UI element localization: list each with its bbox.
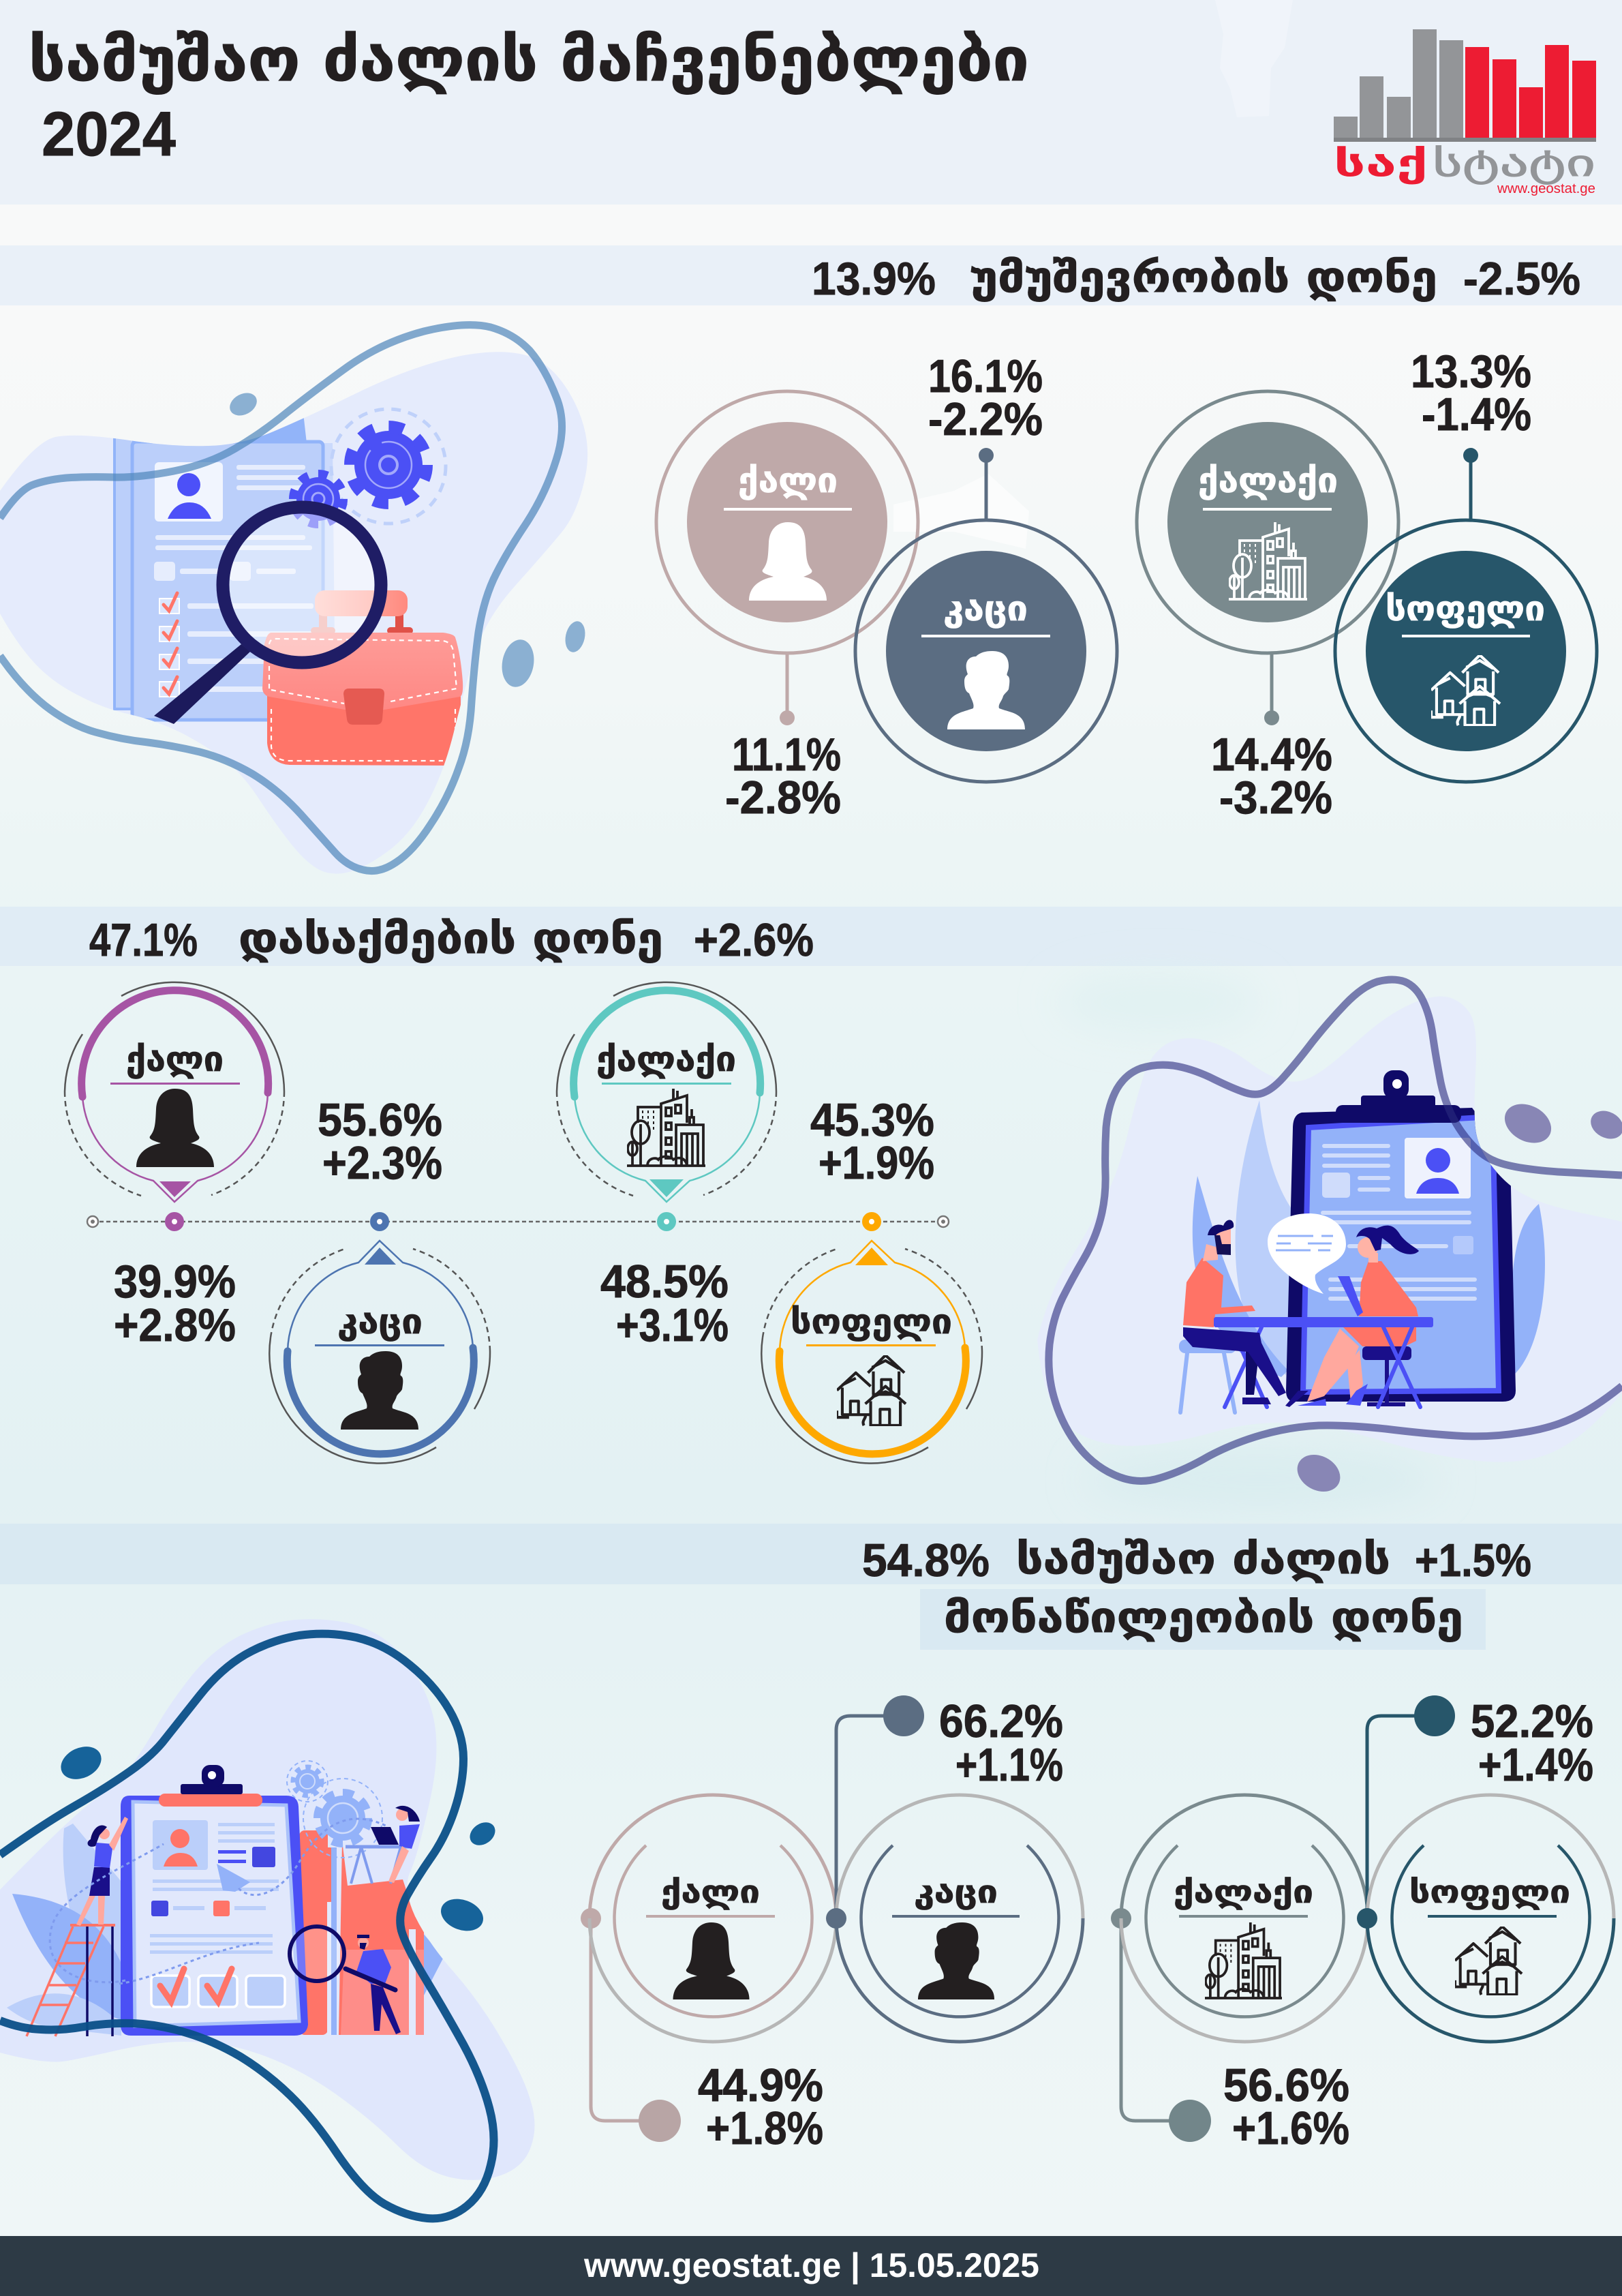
title: 2024: [42, 100, 176, 169]
stat: rural employment: +1.9%: [818, 1137, 934, 1189]
stat: rural unemployment: 13.3%: [1411, 346, 1531, 397]
stat: urban employment: +3.1%: [616, 1299, 729, 1351]
stat: rural unemployment: -1.4%: [1422, 389, 1531, 440]
section 2: employment: [0, 907, 1622, 1510]
heading band: unemployment rate: 13.9%: [812, 253, 936, 305]
heading band: unemployment rate: [0, 245, 1622, 305]
timeline: [87, 1215, 949, 1228]
stat: woman employment: [65, 982, 284, 1351]
stat: rural employment: [761, 1094, 982, 1463]
section 1: unemployment: [0, 245, 1622, 874]
logo bar chart: [1334, 29, 1596, 142]
stat: woman participation: +1.8%: [706, 2102, 823, 2154]
logo url: www.geostat.ge: [1497, 181, 1595, 196]
heading band: employment rate: დასაქმების დონე: [239, 913, 663, 963]
stat: woman employment: +2.8%: [114, 1299, 236, 1351]
stat: rural employment: სოფელი: [791, 1302, 952, 1342]
stat: man unemployment: კაცი: [943, 589, 1028, 629]
stat: man unemployment: 16.1%: [928, 350, 1043, 402]
stat: man employment: [269, 1094, 490, 1463]
stat: rural participation: +1.4%: [1478, 1739, 1593, 1791]
stat: woman unemployment: [656, 391, 918, 824]
illustration: clipboard with people: [0, 1619, 534, 2218]
stat: rural unemployment: სოფელი: [1386, 589, 1545, 629]
stat: man employment: +2.3%: [322, 1137, 442, 1189]
stat: man employment: 55.6%: [318, 1094, 442, 1146]
stat: rural unemployment: [1335, 346, 1597, 782]
logo wordmark: საქ: [1334, 142, 1428, 185]
header band: [0, 0, 1622, 205]
stat: man unemployment: [855, 350, 1117, 782]
heading band: participation rate: +1.5%: [1415, 1535, 1531, 1586]
stat: urban participation: 56.6%: [1223, 2059, 1349, 2111]
stat: man employment: კაცი: [337, 1302, 423, 1342]
heading band: employment rate: +2.6%: [694, 914, 814, 966]
stat: man unemployment: -2.2%: [928, 393, 1043, 445]
watercolour wash behind illustration: [1056, 971, 1438, 1510]
stat: man participation: [826, 1695, 1083, 2042]
stat: urban employment: ქალაქი: [596, 1040, 736, 1079]
heading band: unemployment rate: -2.5%: [1463, 253, 1580, 305]
title: სამუშაო ძალის მაჩვენებლები: [29, 25, 1029, 95]
stat: woman participation: [581, 1795, 836, 2154]
logo wordmark: [1334, 142, 1595, 185]
stat: woman unemployment: 11.1%: [732, 729, 841, 781]
illustration: interview at table: [1037, 980, 1622, 1499]
illustration: job search with briefcase: [0, 325, 587, 874]
stat: man participation: 66.2%: [939, 1695, 1063, 1747]
stat: urban unemployment: -3.2%: [1219, 772, 1332, 824]
stat: woman unemployment: -2.8%: [725, 772, 841, 824]
heading band: participation rate: მონაწილეობის დონე: [944, 1592, 1463, 1642]
stat: woman participation: ქალი: [661, 1873, 760, 1910]
stat: urban participation: [1111, 1795, 1368, 2154]
title: [29, 25, 1029, 169]
stat: man participation: კაცი: [914, 1873, 998, 1910]
stat: urban unemployment: 14.4%: [1211, 729, 1332, 781]
heading band: participation rate: [0, 1524, 1622, 1650]
stat: urban participation: ქალაქი: [1174, 1873, 1313, 1910]
stat: man participation: +1.1%: [955, 1739, 1063, 1791]
stat: rural employment: 45.3%: [810, 1094, 934, 1146]
stat: rural participation: სოფელი: [1409, 1873, 1570, 1910]
heading band: employment rate: 47.1%: [89, 914, 198, 966]
logo: geostat: [1334, 29, 1596, 196]
stat: urban unemployment: ქალაქი: [1198, 461, 1338, 500]
stat: woman employment: ქალი: [126, 1040, 224, 1079]
logo wordmark: სტატი: [1433, 142, 1595, 185]
heading band: participation rate: სამუშაო ძალის: [1016, 1534, 1390, 1584]
stat: urban employment: [557, 982, 776, 1351]
stat: woman employment: 39.9%: [114, 1256, 236, 1308]
stat: rural participation: [1357, 1695, 1614, 2042]
heading band: employment rate: [0, 907, 1622, 966]
heading band: unemployment rate: უმუშევრობის დონე: [970, 252, 1437, 302]
stat: urban participation: +1.6%: [1232, 2102, 1349, 2154]
stat: woman participation: 44.9%: [698, 2059, 823, 2111]
stat: urban unemployment: [1137, 391, 1398, 824]
heading band: participation rate: 54.8%: [862, 1535, 990, 1586]
map fragment backdrop: [893, 474, 1029, 549]
stat: urban employment: 48.5%: [600, 1256, 729, 1308]
footer: [0, 2236, 1622, 2296]
stat: rural participation: 52.2%: [1471, 1695, 1593, 1747]
section 3: labour force participation: [0, 1524, 1622, 2218]
stat: woman unemployment: ქალი: [738, 461, 838, 500]
footer: www.geostat.ge | 15.05.2025: [583, 2246, 1039, 2285]
